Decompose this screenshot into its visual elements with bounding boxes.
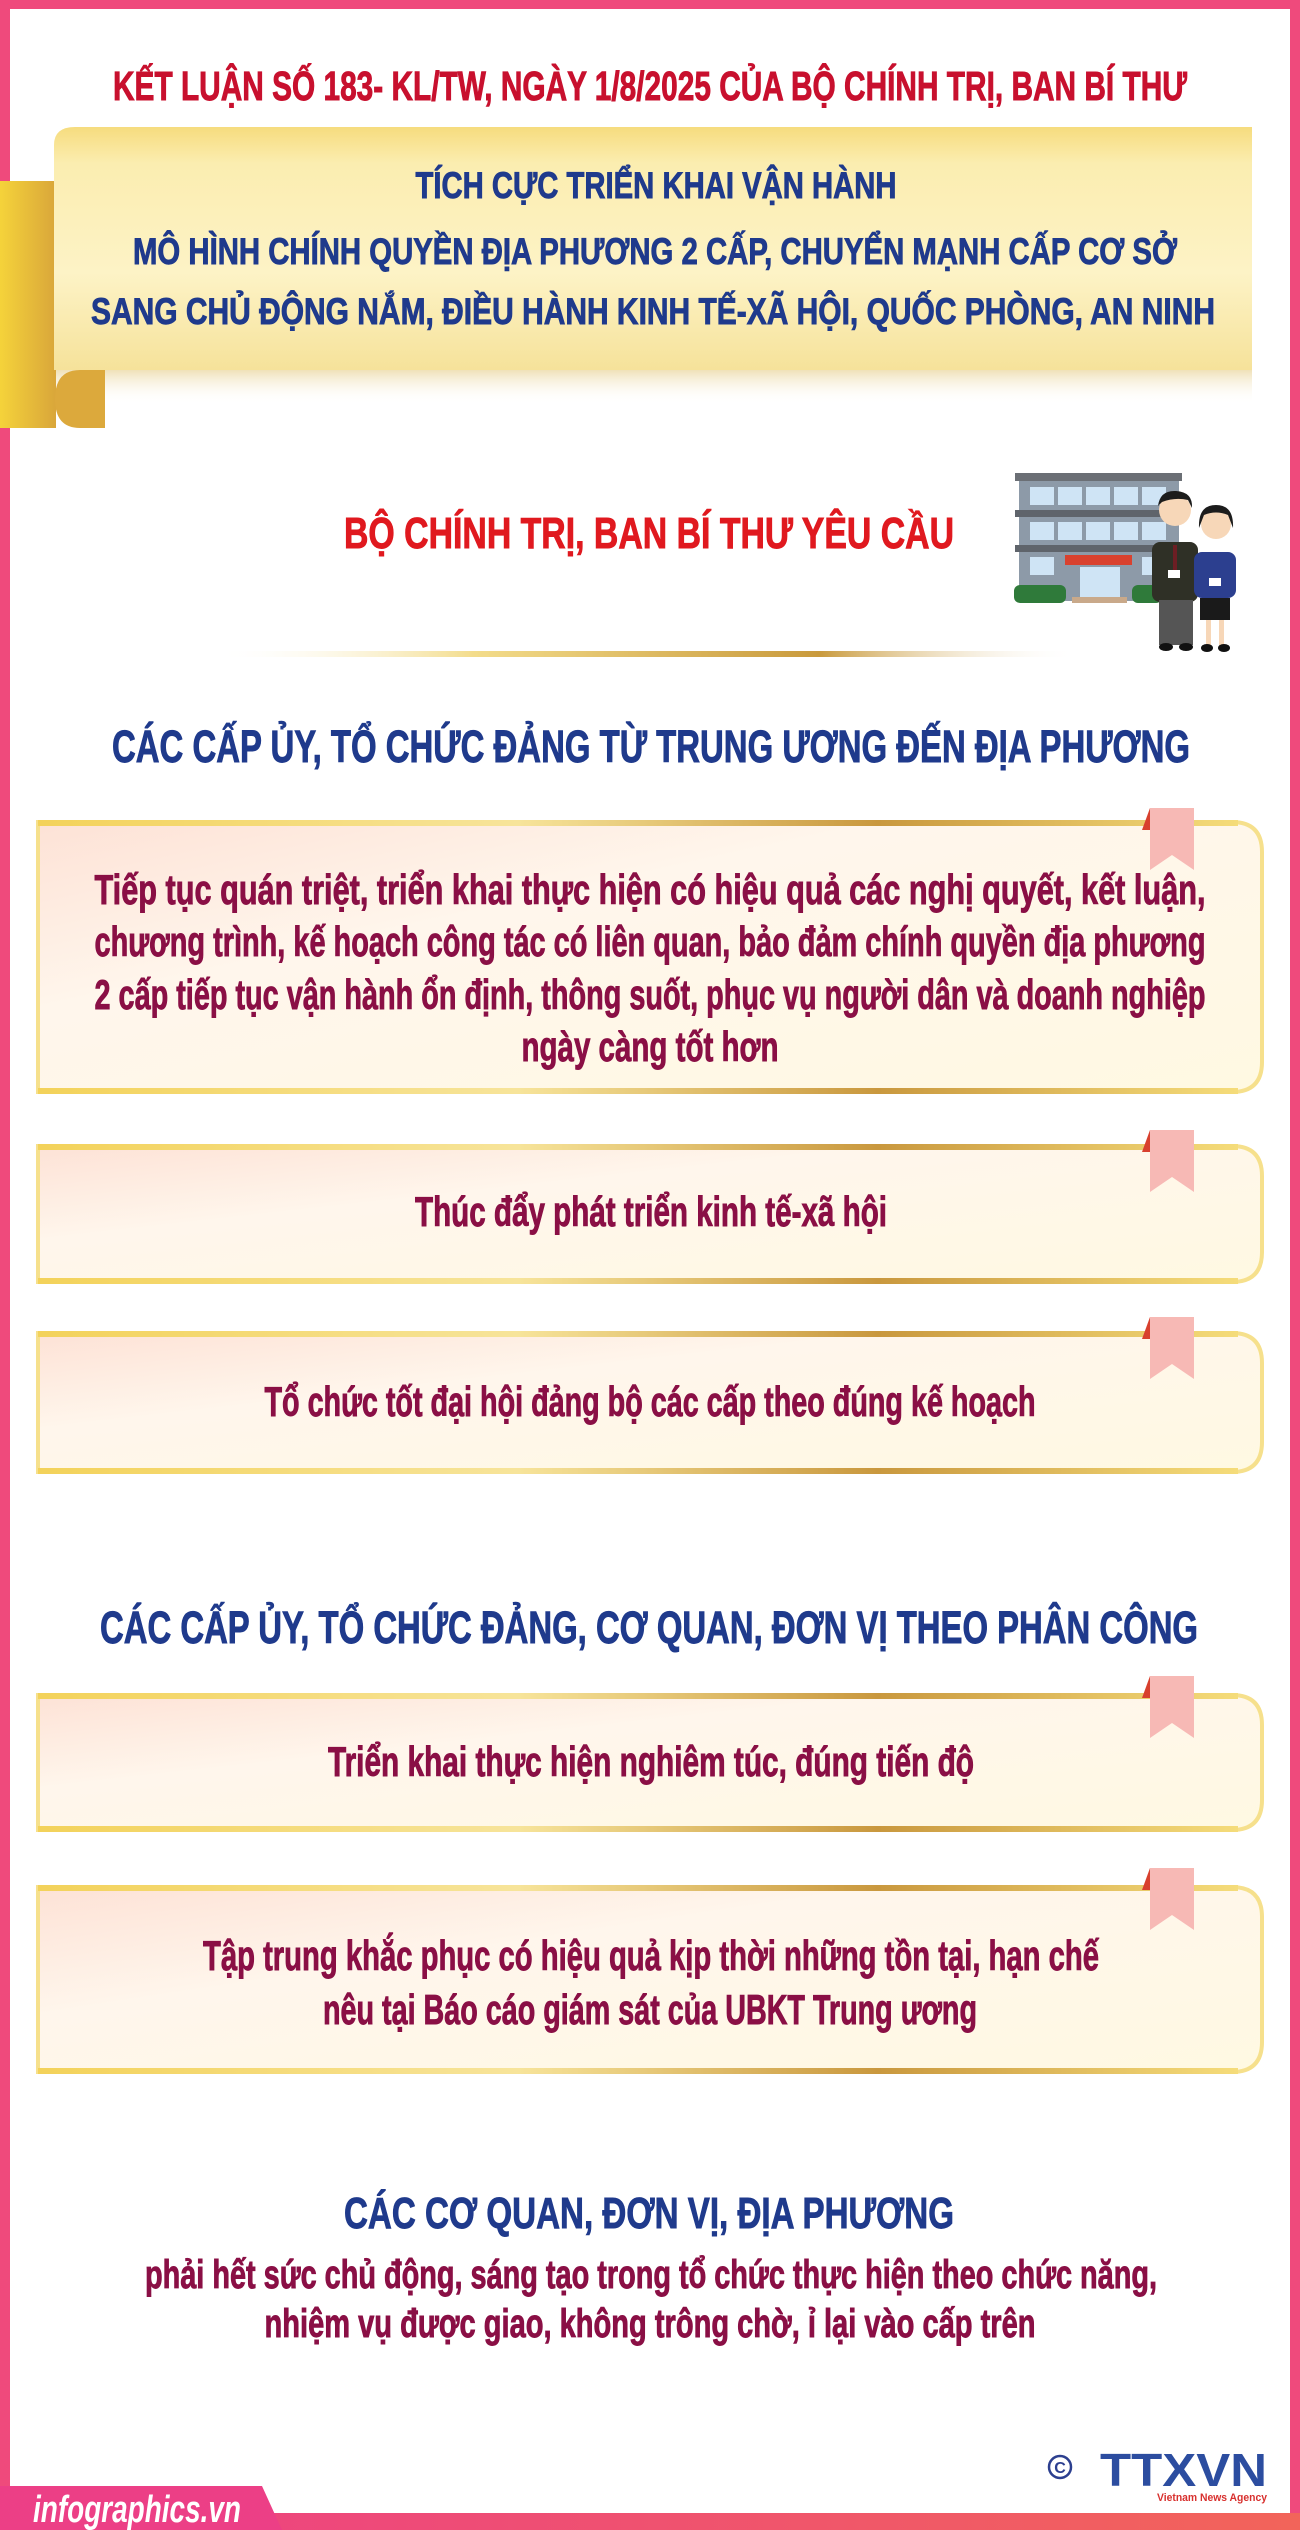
final section: agencies, units, localities: CÁC CƠ QUAN, ĐƠN VỊ, ĐỊA PHƯƠNG	[344, 2188, 954, 2238]
box 2	[38, 1130, 1262, 1284]
box 2: Thúc đẩy phát triển kinh tế-xã hội	[415, 1188, 887, 1235]
box 1: ngày càng tốt hơn	[522, 1023, 778, 1070]
box 3	[38, 1317, 1262, 1474]
gold divider line	[216, 651, 1078, 657]
box 5	[38, 1868, 1262, 2074]
box 5: nêu tại Báo cáo giám sát của UBKT Trung ương	[323, 1986, 977, 2033]
final section: agencies, units, localities: nhiệm vụ được giao, không trông chờ, ỉ lại vào cấp trên	[264, 2302, 1036, 2346]
footer strip	[0, 2513, 1300, 2530]
box 4	[38, 1676, 1262, 1832]
illustration: office building and two officials	[1014, 473, 1236, 652]
logo: TTXVN: TTXVN	[1100, 2444, 1267, 2496]
banner: gold scroll with headline	[0, 127, 1252, 428]
final section: agencies, units, localities	[145, 2188, 1157, 2346]
logo: TTXVN: C	[1054, 2460, 1066, 2477]
heading: politburo requests: BỘ CHÍNH TRỊ, BAN BÍ THƯ YÊU CẦU	[344, 507, 954, 558]
box 4: Triển khai thực hiện nghiêm túc, đúng tiến độ	[328, 1738, 974, 1785]
banner: gold scroll with headline: TÍCH CỰC TRIỂN KHAI VẬN HÀNH	[416, 164, 896, 206]
logo: TTXVN	[1049, 2444, 1268, 2504]
box 1	[38, 808, 1262, 1094]
logo: TTXVN: Vietnam News Agency	[1157, 2492, 1268, 2504]
footer tab: infographics.vn: infographics.vn	[33, 2489, 241, 2530]
